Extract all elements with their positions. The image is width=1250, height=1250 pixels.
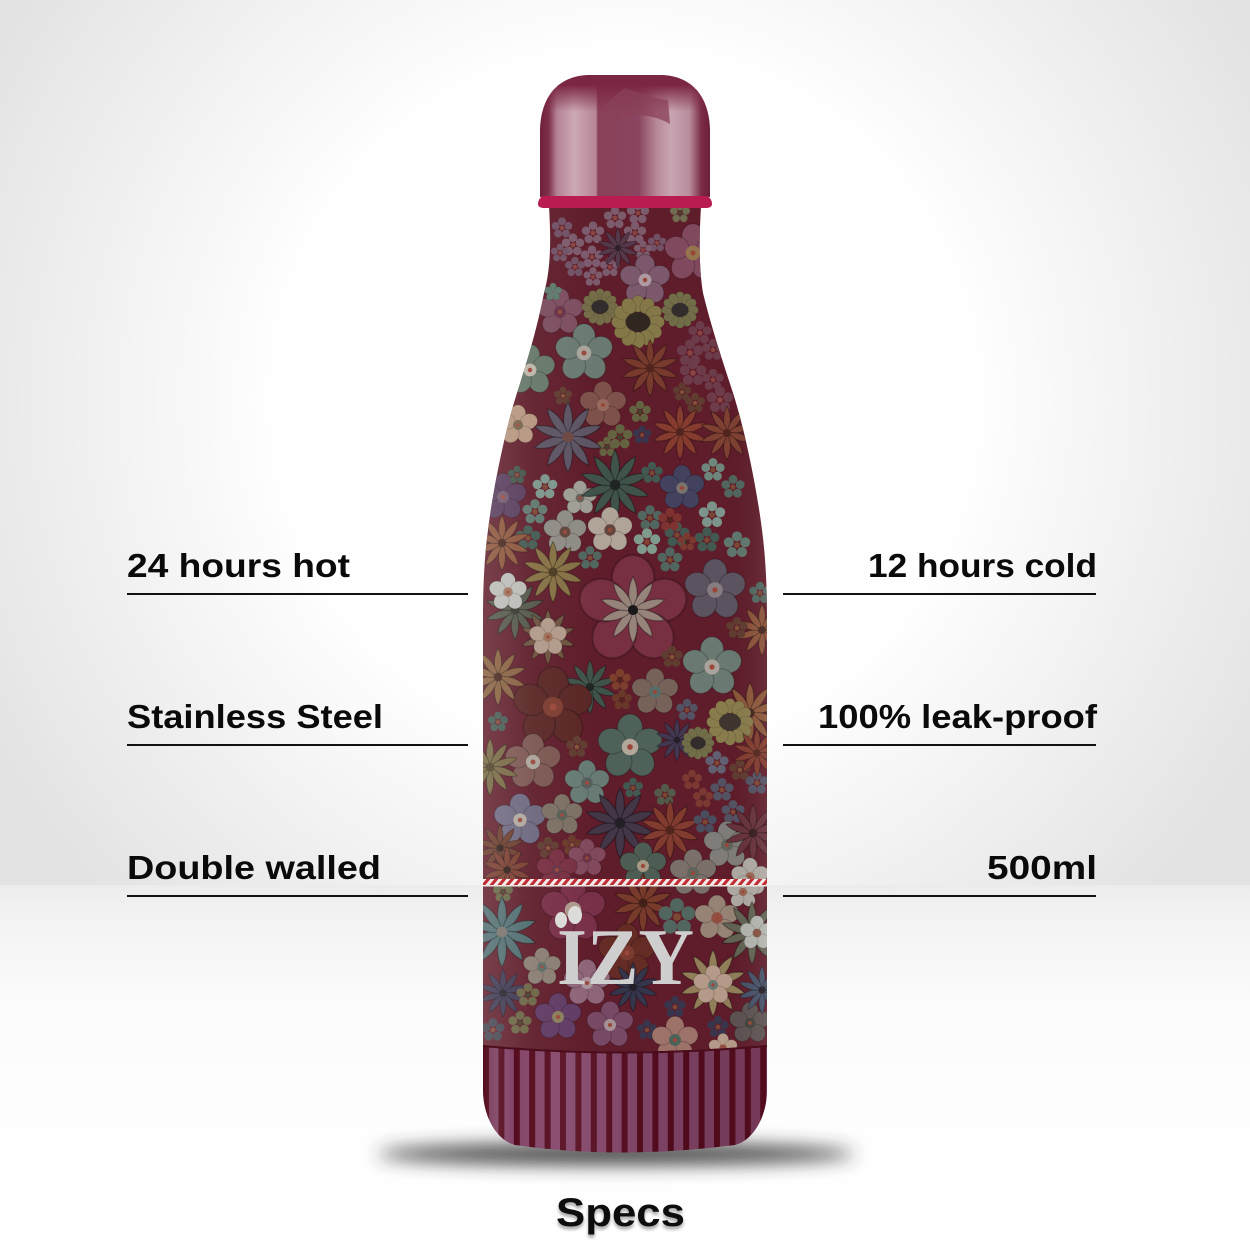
- bottle shadow: [378, 1143, 854, 1165]
- spec: 100% leak-proof: 100% leak-proof: [818, 698, 1098, 735]
- spec: Double walled: Double walled: [127, 849, 381, 886]
- IZY logo: IZY: [557, 914, 694, 1002]
- logo silhouette: [555, 906, 582, 928]
- spec: 12 hours cold: 12 hours cold: [868, 547, 1097, 584]
- spec: 24 hours hot: 24 hours hot: [127, 547, 350, 584]
- cap ring: [538, 196, 712, 208]
- heading: Specs: Specs: [556, 1191, 685, 1235]
- rope stripe band: [483, 879, 767, 886]
- striped base: [483, 1045, 767, 1152]
- spec: Stainless Steel: Stainless Steel: [127, 698, 383, 735]
- floral bottle body: [483, 208, 767, 1052]
- bottle: [482, 75, 768, 1152]
- cap: [538, 75, 712, 208]
- spec: 500ml: 500ml: [987, 849, 1097, 886]
